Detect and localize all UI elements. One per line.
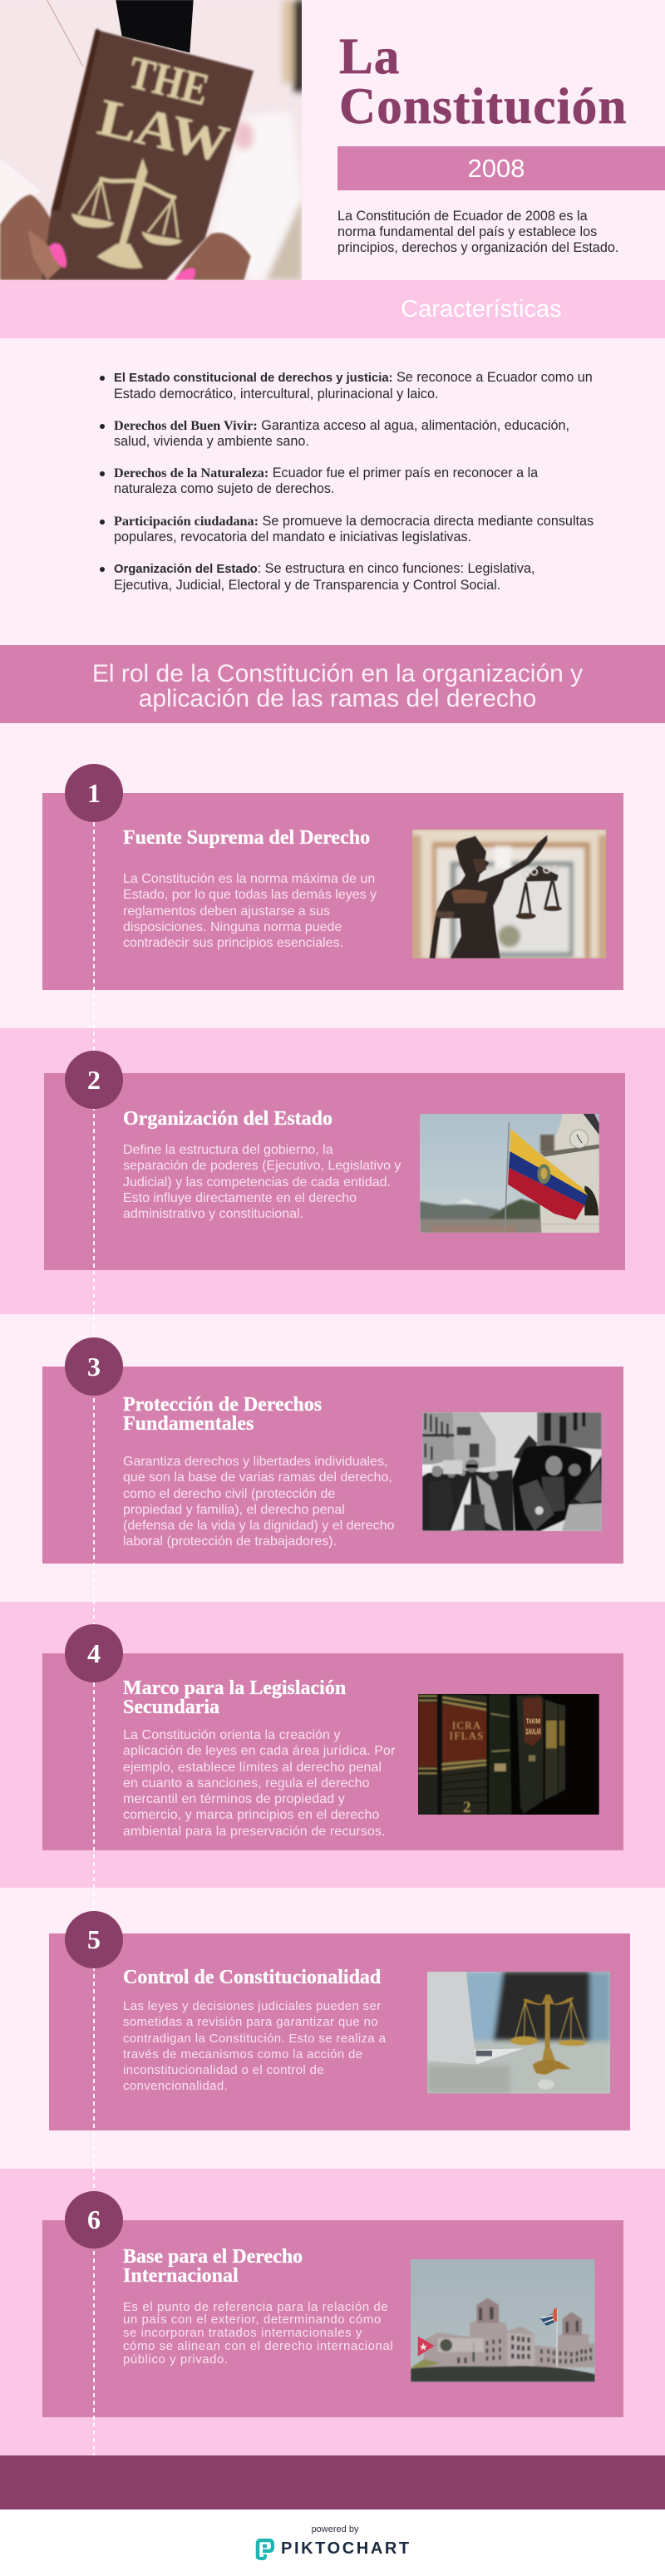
powered by label: powered by (312, 2524, 358, 2534)
title: Constitución (339, 79, 628, 135)
photo: Ecuador flag (420, 1114, 599, 1233)
card 6 title (123, 2246, 303, 2287)
card 5 text: contradigan la Constitución. Esto se realiza a (123, 2032, 386, 2046)
number badge 1: 1 (87, 778, 101, 808)
card 3 text: propiedad y familia), el derecho penal (123, 1503, 345, 1517)
list item: buen vivir: salud, vivienda y ambiente sano. (114, 434, 309, 449)
section 3 (0, 1314, 665, 1602)
card 5 text: inconstitucionalidad o el control de (123, 2063, 324, 2077)
card 3 text: Garantiza derechos y libertades individuales, (123, 1455, 387, 1469)
card 6 title: Internacional (123, 2265, 239, 2287)
list item: estado constitucional (114, 370, 593, 401)
card 1 text: reglamentos deben ajustarse a sus (123, 904, 330, 919)
photo: law books: TAKIMI (526, 1717, 540, 1725)
card 3 text: como el derecho civil (protección de (123, 1487, 335, 1501)
card 2 text (123, 1143, 401, 1221)
card 6 text: público y privado. (123, 2352, 229, 2367)
card 1 text (123, 872, 377, 950)
card 4 text: comercio, y marca principios en el derecho (123, 1808, 379, 1822)
list item: participación: Participación ciudadana: Se promueve la democracia directa mediante consultas (114, 514, 594, 529)
card 3 text: (defensa de la vida y la dignidad) y el derecho (123, 1519, 394, 1533)
card 3 title (123, 1393, 322, 1435)
card 4 text: mercantil en términos de propiedad y (123, 1792, 345, 1806)
number badge 6: 6 (87, 2204, 101, 2234)
heading band: rol de la Constitución (0, 645, 665, 723)
card 1 text: La Constitución es la norma máxima de un (123, 872, 375, 886)
intro text: La Constitución de Ecuador de 2008 es la (337, 209, 588, 224)
heading text: El rol de la Constitución en la organización y (92, 660, 583, 687)
card 5 text (123, 1999, 386, 2093)
card 1 text: Estado, por lo que todas las demás leyes y (123, 888, 377, 902)
number badge 3: 3 (87, 1352, 101, 1382)
panel: characteristics list (100, 370, 594, 593)
year band (337, 146, 665, 190)
number badge 2: 2 (87, 1065, 101, 1095)
card 6 text: cómo se alinean con el derecho internacional (123, 2339, 393, 2353)
card 5 text: Las leyes y decisiones judiciales pueden ser (123, 1999, 382, 2013)
card 4 title: Secundaria (123, 1696, 219, 1717)
card 2 text: Esto influye directamente en el derecho (123, 1191, 357, 1205)
photo: law books: IFLAS (450, 1730, 485, 1741)
card 6 text: un país con el exterior, determinando cómo (123, 2312, 382, 2327)
card 6 text (123, 2299, 393, 2367)
card 5 text: través de mecanismos como la acción de (123, 2047, 362, 2061)
intro text (337, 209, 618, 255)
list item: buen vivir (114, 418, 569, 449)
photo: golden scales and laptop (427, 1972, 610, 2094)
number badge 5: 5 (87, 1924, 101, 1954)
card 2 title: Organización del Estado (123, 1107, 332, 1129)
card 6 text: Es el punto de referencia para la relación de (123, 2299, 388, 2314)
number badge 2 (65, 1051, 123, 1109)
heading text (92, 660, 583, 712)
heading: características: Características (401, 296, 562, 323)
intro text: norma fundamental del país y establece los (337, 224, 597, 239)
intro text: principios, derechos y organización del Estado. (337, 240, 618, 255)
list item: naturaleza: Derechos de la Naturaleza: Ecuador fue el primer país en reconocer a la (114, 465, 538, 480)
card 6 (42, 2220, 623, 2417)
list item: naturaleza (114, 465, 539, 496)
card 4 text: ejemplo, establece límites al derecho penal (123, 1761, 382, 1775)
photo: law books: ICRA (452, 1720, 481, 1731)
card 5 text: sometidas a revisión para garantizar que no (123, 2015, 378, 2029)
icon: Piktochart logo (256, 2539, 274, 2560)
card 3 text (123, 1455, 394, 1549)
number badge 1 (65, 764, 123, 822)
footer: powered by Piktochart (0, 2510, 665, 2576)
section 5 (0, 1888, 665, 2169)
list item: organización (114, 561, 535, 593)
number badge 5 (65, 1911, 123, 1968)
card 2 text: administrativo y constitucional. (123, 1207, 303, 1221)
card 6 text: se incorporan tratados internacionales y (123, 2326, 362, 2340)
photo: statue of justice (412, 830, 606, 958)
section 4 (0, 1602, 665, 1888)
list item: buen vivir: Derechos del Buen Vivir: Garantiza acceso al agua, alimentación, educación, (114, 418, 569, 433)
section 1 (0, 723, 665, 1028)
heading text: aplicación de las ramas del derecho (139, 685, 536, 712)
card 1 title: Fuente Suprema del Derecho (123, 827, 370, 849)
card 2 text: Define la estructura del gobierno, la (123, 1143, 333, 1157)
card 4 text: en cuanto a sanciones, regula el derecho (123, 1776, 370, 1790)
card 1 text: contradecir sus principios esenciales. (123, 936, 343, 950)
card 3 (42, 1367, 623, 1564)
list item: organización: Ejecutiva, Judicial, Electoral y de Transparencia y Control Social. (114, 578, 500, 593)
card 1 text: disposiciones. Ninguna norma puede (123, 920, 342, 934)
photo: Havana hotel and flags (411, 2259, 595, 2382)
photo: law books (418, 1694, 599, 1815)
title: La (339, 29, 401, 85)
card 4 text: La Constitución orienta la creación y (123, 1728, 341, 1742)
photo: protest crowd (422, 1412, 602, 1531)
card 4 text: ambiental para la preservación de recursos. (123, 1825, 386, 1839)
card 4 title: Marco para la Legislación (123, 1677, 346, 1699)
card 3 title: Fundamentales (123, 1413, 254, 1435)
card 2 text: separación de poderes (Ejecutivo, Legislativo y (123, 1159, 401, 1173)
list item: participación: populares, revocatoria del mandato e iniciativas legislativas. (114, 529, 471, 544)
list item: estado constitucional: El Estado constitucional de derechos y justicia: Se reconoce a Ecuador como un (114, 370, 593, 385)
heading band: características (0, 280, 665, 338)
card 4 text (123, 1728, 396, 1839)
list item: participación (114, 514, 594, 544)
panel: header photo, book The Law (0, 0, 302, 280)
year band: 2008 (468, 154, 525, 183)
dashed timeline (93, 822, 95, 2455)
card 4 text: aplicación de leyes en cada área jurídica. Por (123, 1744, 395, 1758)
panel: header photo, book The Law: LAW (93, 88, 234, 174)
number badge 4 (65, 1624, 123, 1682)
title (339, 29, 628, 135)
card 1 (42, 793, 623, 990)
wordmark: Piktochart: PIKTOCHART (281, 2539, 411, 2558)
list item: naturaleza: naturaleza como sujeto de derechos. (114, 481, 334, 496)
card 5 (48, 1933, 630, 2130)
number badge 6 (65, 2191, 123, 2248)
card 4 title (123, 1677, 346, 1717)
number badge 4: 4 (87, 1638, 101, 1668)
section 2 (0, 1028, 665, 1314)
list item: organización: Organización del Estado: Se estructura en cinco funciones: Legislativa, (114, 561, 535, 576)
section 6 (0, 2169, 665, 2455)
footer band (0, 2455, 665, 2510)
card 2 text: Judicial) y las competencias de cada entidad. (123, 1175, 391, 1189)
card 6 title: Base para el Derecho (123, 2246, 303, 2268)
photo: law books: DAVALAR (526, 1727, 541, 1736)
number badge 3 (65, 1337, 123, 1396)
card 5 title: Control de Constitucionalidad (123, 1967, 381, 1988)
card 2 (43, 1073, 625, 1270)
card 3 text: laboral (protección de trabajadores). (123, 1534, 337, 1549)
card 4 (42, 1653, 623, 1850)
card 3 title: Protección de Derechos (123, 1393, 322, 1415)
panel: header photo, book The Law: THE (124, 47, 214, 116)
card 5 text: convencionalidad. (123, 2079, 228, 2093)
card 3 text: que son la base de varias ramas del derecho, (123, 1470, 392, 1485)
list item: estado constitucional: Estado democrático, intercultural, plurinacional y laico. (114, 387, 439, 401)
